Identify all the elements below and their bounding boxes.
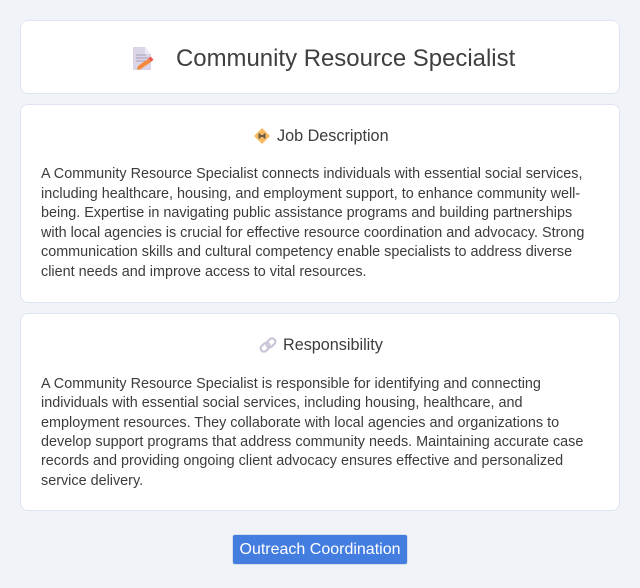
button: outreach coordination: Outreach Coordination xyxy=(240,541,400,558)
text block: job description xyxy=(41,166,584,280)
heading: job description: Job Description xyxy=(277,127,389,145)
panel: title card xyxy=(20,20,620,94)
text block: job description: client needs and improve access to vital resources. xyxy=(41,264,367,280)
panel: responsibility xyxy=(20,313,620,511)
text block: responsibility: A Community Resource Specialist is responsible for identifying and connecting xyxy=(41,376,541,392)
heading: responsibility: Responsibility xyxy=(283,336,383,354)
text block: job description: with local agencies is crucial for effective resource coordination and advocacy. Strong xyxy=(41,224,584,240)
text block: responsibility: individuals with essential social services, including housing, healthcare, and xyxy=(41,395,523,411)
text block: job description: including healthcare, housing, and employment support, to enhance community well- xyxy=(41,186,580,202)
icon: chain link xyxy=(260,337,276,353)
text block: job description: being. Expertise in navigating public assistance programs and building partnerships xyxy=(41,205,572,221)
text block: responsibility: employment resources. They collaborate with local agencies and organizations to xyxy=(41,415,559,431)
icon: diamond sign xyxy=(254,128,270,144)
text block: responsibility: service delivery. xyxy=(41,472,143,488)
icon: document with pencil xyxy=(133,47,154,70)
text block: responsibility: records and providing ongoing client advocacy ensures effective and personalized xyxy=(41,453,563,469)
panel: job description xyxy=(20,104,620,303)
text block: job description: A Community Resource Specialist connects individuals with essential social services, xyxy=(41,166,582,182)
text block: job description: communication skills and cultural competency enable specialists to address diverse xyxy=(41,244,572,260)
text block: responsibility xyxy=(41,376,583,488)
button: outreach coordination xyxy=(232,534,408,565)
title: Community Resource Specialist xyxy=(176,45,515,72)
text block: responsibility: develop support programs that address community needs. Maintaining accurate case xyxy=(41,434,583,450)
